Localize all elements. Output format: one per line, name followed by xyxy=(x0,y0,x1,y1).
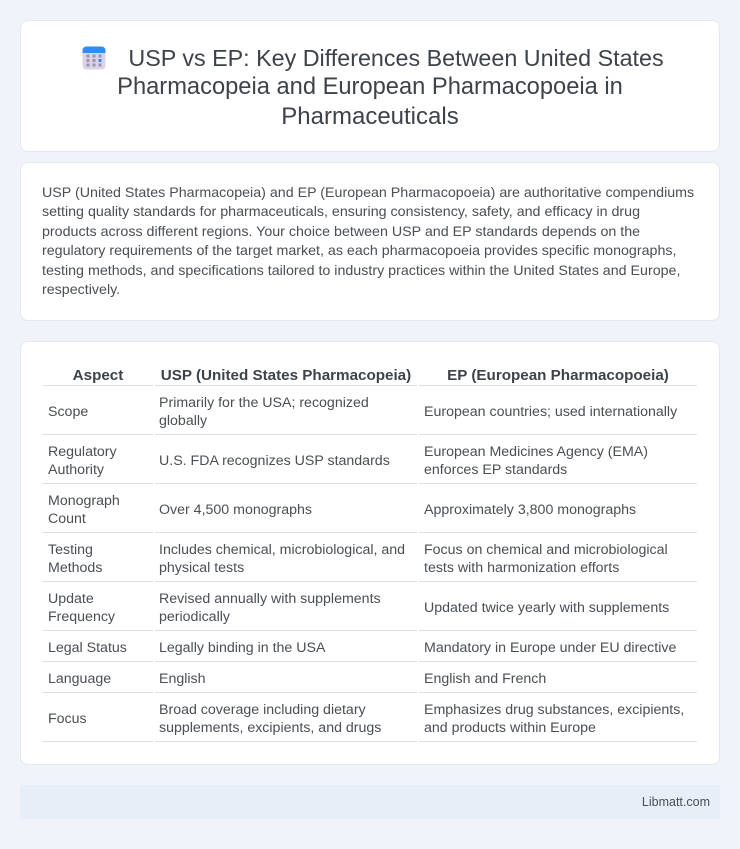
row: Testing Methods xyxy=(48,542,102,576)
USP testing: physical tests xyxy=(159,560,244,576)
EP update: Updated twice yearly with supplements xyxy=(424,600,669,616)
EP authority: European Medicines Agency (EMA) xyxy=(424,444,648,460)
USP testing xyxy=(159,542,405,576)
USP focus xyxy=(159,702,381,736)
title: USP vs EP: Key Differences Between United States xyxy=(128,45,664,71)
row: Scope: Scope xyxy=(48,404,88,420)
title: Pharmacopeia and European Pharmacopoeia in xyxy=(117,74,623,100)
row: Regulatory Authority: Authority xyxy=(48,462,104,478)
row: Update Frequency xyxy=(48,591,115,625)
USP language: English xyxy=(159,671,206,687)
EP focus: Emphasizes drug substances, excipients, xyxy=(424,702,684,718)
EP testing: Focus on chemical and microbiological xyxy=(424,542,668,558)
row: Regulatory Authority xyxy=(48,444,117,478)
row: Regulatory Authority: Regulatory xyxy=(48,444,117,460)
USP authority: U.S. FDA recognizes USP standards xyxy=(159,453,390,469)
row: Monograph Count xyxy=(48,493,120,527)
footer credit: Libmatt.com xyxy=(642,795,710,809)
header: EP: EP (European Pharmacopoeia) xyxy=(447,367,669,384)
intro paragraph: setting quality standards for pharmaceuticals, ensuring consistency, safety, and efficacy in drug xyxy=(42,204,640,220)
USP update xyxy=(159,591,381,625)
EP testing: tests with harmonization efforts xyxy=(424,560,619,576)
row: Testing Methods: Methods xyxy=(48,560,102,576)
USP focus: Broad coverage including dietary xyxy=(159,702,366,718)
row: Legal Status: Legal Status xyxy=(48,640,127,656)
USP update: periodically xyxy=(159,609,230,625)
row: Monograph Count: Monograph xyxy=(48,493,120,509)
row: Language: Language xyxy=(48,671,111,687)
EP legal: Mandatory in Europe under EU directive xyxy=(424,640,676,656)
EP authority: enforces EP standards xyxy=(424,462,567,478)
row: Focus: Focus xyxy=(48,711,87,727)
EP authority xyxy=(424,444,648,478)
icon: calendar xyxy=(82,46,106,70)
USP legal: Legally binding in the USA xyxy=(159,640,325,656)
EP focus xyxy=(424,702,684,736)
EP focus: and products within Europe xyxy=(424,720,596,736)
USP focus: supplements, excipients, and drugs xyxy=(159,720,381,736)
EP testing xyxy=(424,542,668,576)
USP scope: globally xyxy=(159,413,207,429)
USP scope: Primarily for the USA; recognized xyxy=(159,395,369,411)
title: Pharmaceuticals xyxy=(281,103,459,130)
header: USP: USP (United States Pharmacopeia) xyxy=(161,367,411,384)
row: Monograph Count: Count xyxy=(48,511,86,527)
intro paragraph: regulatory requirements of the target market, as each pharmacopoeia provides specific monographs, xyxy=(42,243,676,259)
EP monographs: Approximately 3,800 monographs xyxy=(424,502,636,518)
EP scope: European countries; used internationally xyxy=(424,404,677,420)
intro paragraph: products across different regions. Your choice between USP and EP standards depends on the xyxy=(42,224,640,240)
row: Update Frequency: Frequency xyxy=(48,609,115,625)
USP testing: Includes chemical, microbiological, and xyxy=(159,542,405,558)
title xyxy=(117,45,664,130)
title card xyxy=(20,20,720,152)
intro paragraph: testing methods, and specifications tailored to industry practices within the United States and Europe, xyxy=(42,263,680,279)
footer xyxy=(20,785,720,819)
row: Testing Methods: Testing xyxy=(48,542,93,558)
EP language: English and French xyxy=(424,671,546,687)
USP update: Revised annually with supplements xyxy=(159,591,381,607)
USP monographs: Over 4,500 monographs xyxy=(159,502,312,518)
table card xyxy=(20,341,720,765)
intro paragraph: respectively. xyxy=(42,282,120,298)
intro card xyxy=(20,162,720,321)
intro paragraph: USP (United States Pharmacopeia) and EP (European Pharmacopoeia) are authoritative compendiums xyxy=(42,185,694,201)
header: Aspect: Aspect xyxy=(73,367,123,384)
intro paragraph xyxy=(42,185,694,298)
row: Update Frequency: Update xyxy=(48,591,94,607)
USP scope xyxy=(159,395,369,429)
